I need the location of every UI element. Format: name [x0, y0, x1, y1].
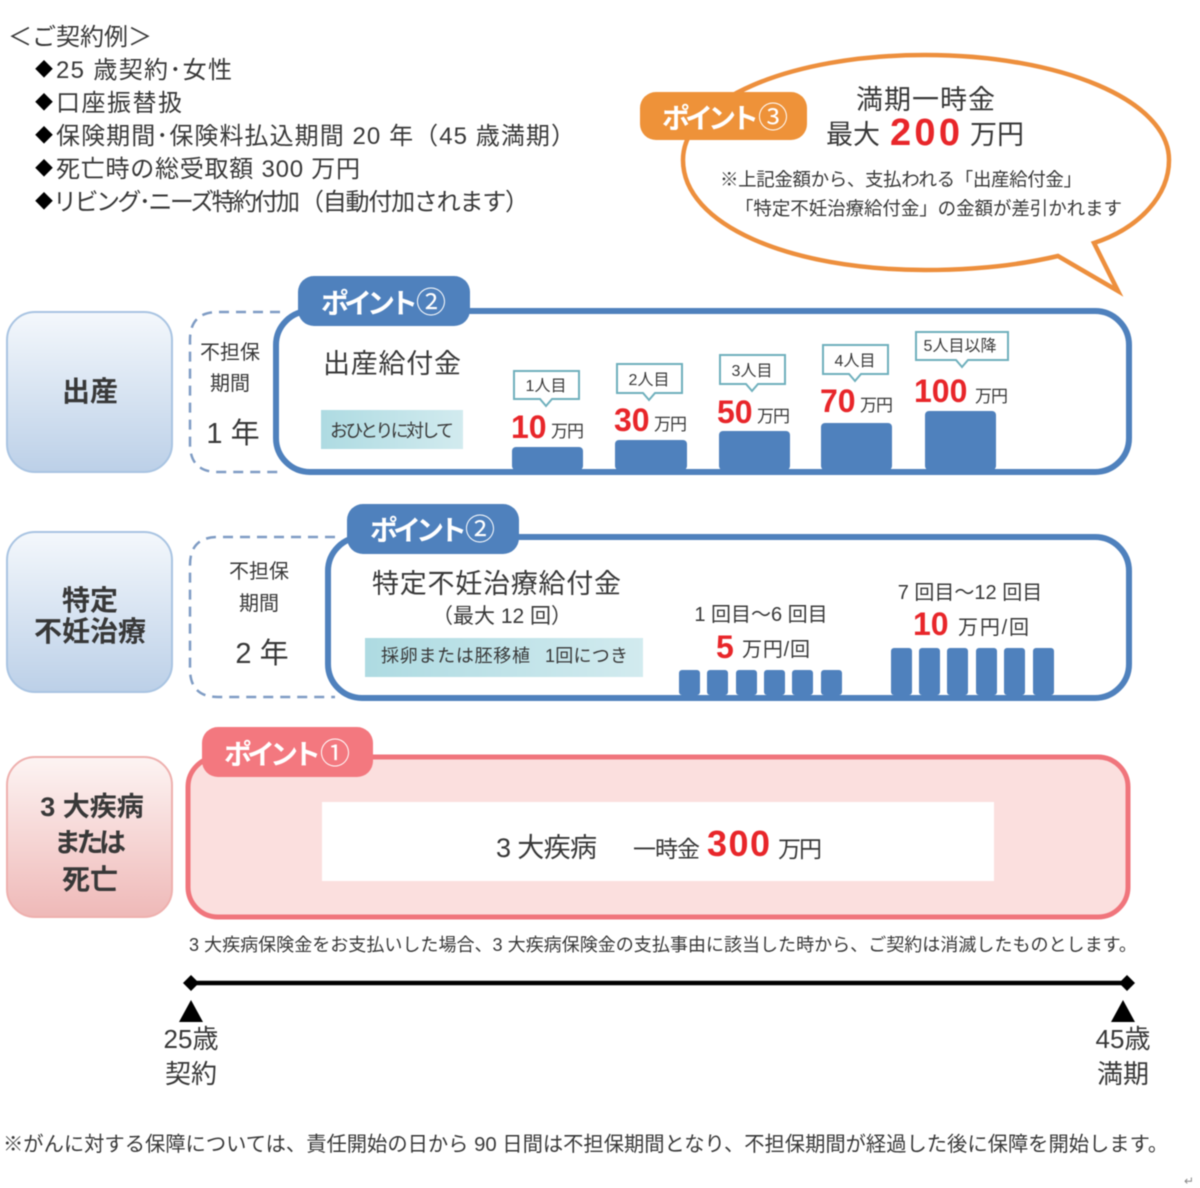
bar chart: birth benefits: 10 — [511, 409, 547, 445]
waiting period 1 year: 1 年 — [206, 417, 260, 450]
badge: point 3: ③ — [758, 102, 788, 135]
bar chart: birth benefits: 100 — [914, 373, 967, 409]
label: infertility treatment: 特定 — [62, 585, 118, 616]
speech bubble: point 3: 万円 — [970, 120, 1024, 150]
contract example text block: ＜ご契約例＞ — [8, 24, 152, 51]
badge: point 2: ポイント — [321, 288, 418, 319]
bar chart: treatments 7-12: 7 回目～12 回目 — [898, 582, 1042, 604]
badge: point 2: ② — [465, 514, 495, 547]
label: three major diseases or death: 死亡 — [62, 864, 118, 895]
panel: childbirth benefit: 出産給付金 — [323, 349, 461, 379]
bar chart: treatments 1-6: 万円/回 — [742, 639, 810, 661]
bar chart: treatments 1-6: 1 回目～6 回目 — [694, 604, 828, 626]
bar chart: birth benefits: 1人目 — [526, 378, 566, 395]
label: childbirth — [7, 312, 172, 472]
bar chart: birth benefits: 万円 — [654, 415, 687, 434]
label: infertility treatment — [7, 532, 172, 692]
white box: lump sum — [322, 802, 994, 881]
bar chart: birth benefits: 万円 — [757, 407, 790, 426]
waiting period 1 year: 期間 — [210, 373, 250, 395]
badge: point 1: ① — [320, 738, 350, 771]
label: three major diseases or death: または — [54, 828, 126, 858]
tag: per child: おひとりに対して — [330, 421, 454, 441]
timeline end label: 満期 — [1097, 1059, 1149, 1089]
contract example text block: ◆ — [35, 60, 53, 80]
white box: lump sum: 3 大疾病 — [496, 833, 597, 863]
panel: three major diseases benefit — [188, 727, 1128, 917]
return mark: ↵ — [1184, 1174, 1194, 1188]
contract example text block — [8, 24, 575, 216]
timeline start label: 契約 — [165, 1059, 217, 1089]
bar chart: treatments 7-12: 万円/回 — [958, 617, 1029, 639]
label: three major diseases or death: 3 大疾病 — [40, 792, 144, 822]
badge: point 2 — [347, 504, 519, 554]
contract example text block: 口座振替扱 — [56, 90, 182, 117]
contract example text block: 25 歳契約･女性 — [56, 57, 232, 84]
speech bubble: point 3: 200 — [890, 112, 960, 154]
timeline end label — [1096, 1024, 1150, 1089]
badge: point 1 — [202, 727, 373, 777]
speech bubble: point 3: ※上記金額から、支払われる「出産給付金」 — [720, 169, 1082, 190]
footnote: ※がんに対する保障については、責任開始の日から 90 日間は不担保期間となり、不担保期間が経過した後に保障を開始します。 — [3, 1133, 1168, 1156]
waiting period 2 years: 2 年 — [235, 637, 289, 670]
label: three major diseases or death — [7, 757, 172, 917]
bar chart: birth benefits: 万円 — [551, 422, 584, 441]
white box: lump sum: 一時金 — [633, 836, 700, 862]
bar chart: birth benefits: 50 — [717, 394, 753, 430]
bar chart: treatments 7-12: 10 — [913, 606, 949, 642]
timeline start label — [164, 1024, 218, 1089]
bar chart: treatments 1-6 — [679, 604, 842, 695]
tag: per child — [321, 410, 463, 449]
speech bubble: point 3: 満期一時金 — [856, 85, 995, 115]
bar chart: birth benefits: 5人目以降 — [924, 337, 996, 355]
panel: childbirth benefit — [276, 276, 1129, 472]
badge: point 2: ポイント — [370, 515, 467, 546]
waiting period 1 year — [190, 312, 280, 472]
contract example text block: ◆ — [35, 126, 53, 146]
white box: lump sum: 万円 — [778, 836, 822, 862]
waiting period 2 years: 期間 — [239, 593, 279, 615]
bar chart: treatments 7-12 — [891, 582, 1054, 695]
contract example text block: （自動付加されます） — [300, 189, 529, 216]
bar chart: birth benefits — [511, 332, 1008, 470]
contract example text block: ◆ — [35, 192, 53, 212]
bar chart: birth benefits: 30 — [614, 402, 650, 438]
speech bubble: point 3: 「特定不妊治療給付金」の金額が差引かれます — [735, 198, 1122, 219]
panel: infertility treatment benefit — [328, 504, 1129, 698]
waiting period 1 year: 不担保 — [200, 341, 260, 364]
bar chart: treatments 1-6: 5 — [716, 629, 734, 665]
badge: point 2 — [298, 276, 470, 326]
timeline end label: 45歳 — [1096, 1024, 1150, 1054]
tag: per procedure: 1回につき — [545, 646, 628, 666]
speech bubble: point 3: 最大 — [826, 120, 880, 150]
tag: per procedure — [365, 638, 643, 677]
bar chart: birth benefits: 70 — [820, 383, 856, 419]
contract example text block: 保険期間･保険料払込期間 20 年（45 歳満期） — [56, 123, 575, 150]
badge: point 2: ② — [416, 287, 446, 320]
contract example text block: リビング･ニーズ特約付加 — [53, 189, 300, 216]
bar chart: birth benefits: 万円 — [975, 387, 1008, 406]
panel: infertility treatment benefit: （最大 12 回） — [432, 605, 572, 628]
bar chart: birth benefits: 3人目 — [732, 363, 772, 380]
badge: point 1: ポイント — [224, 739, 321, 770]
timeline start label: 25歳 — [164, 1024, 218, 1054]
white box: lump sum: 300 — [707, 823, 770, 864]
bar chart: birth benefits: 万円 — [860, 396, 893, 415]
label: infertility treatment: 不妊治療 — [34, 616, 146, 647]
label: childbirth: 出産 — [62, 376, 118, 407]
bar chart: birth benefits: 2人目 — [629, 372, 669, 389]
speech bubble: point 3 — [640, 55, 1169, 291]
badge: point 3 — [640, 92, 807, 140]
note: policy termination: 3 大疾病保険金をお支払いした場合、3 大疾病保険金の支払事由に該当した時から、ご契約は消滅したものとします。 — [189, 935, 1137, 955]
panel: infertility treatment benefit: 特定不妊治療給付金 — [372, 569, 621, 599]
contract example text block: ◆ — [35, 93, 53, 113]
bar chart: birth benefits: 4人目 — [835, 353, 875, 370]
waiting period 2 years — [190, 537, 335, 697]
timeline arrow — [179, 975, 1135, 1022]
contract example text block: 死亡時の総受取額 300 万円 — [56, 156, 360, 183]
waiting period 2 years: 不担保 — [229, 560, 289, 583]
contract example text block: ◆ — [35, 159, 53, 179]
tag: per procedure: 採卵または胚移植 — [381, 645, 530, 666]
badge: point 3: ポイント — [662, 103, 759, 134]
